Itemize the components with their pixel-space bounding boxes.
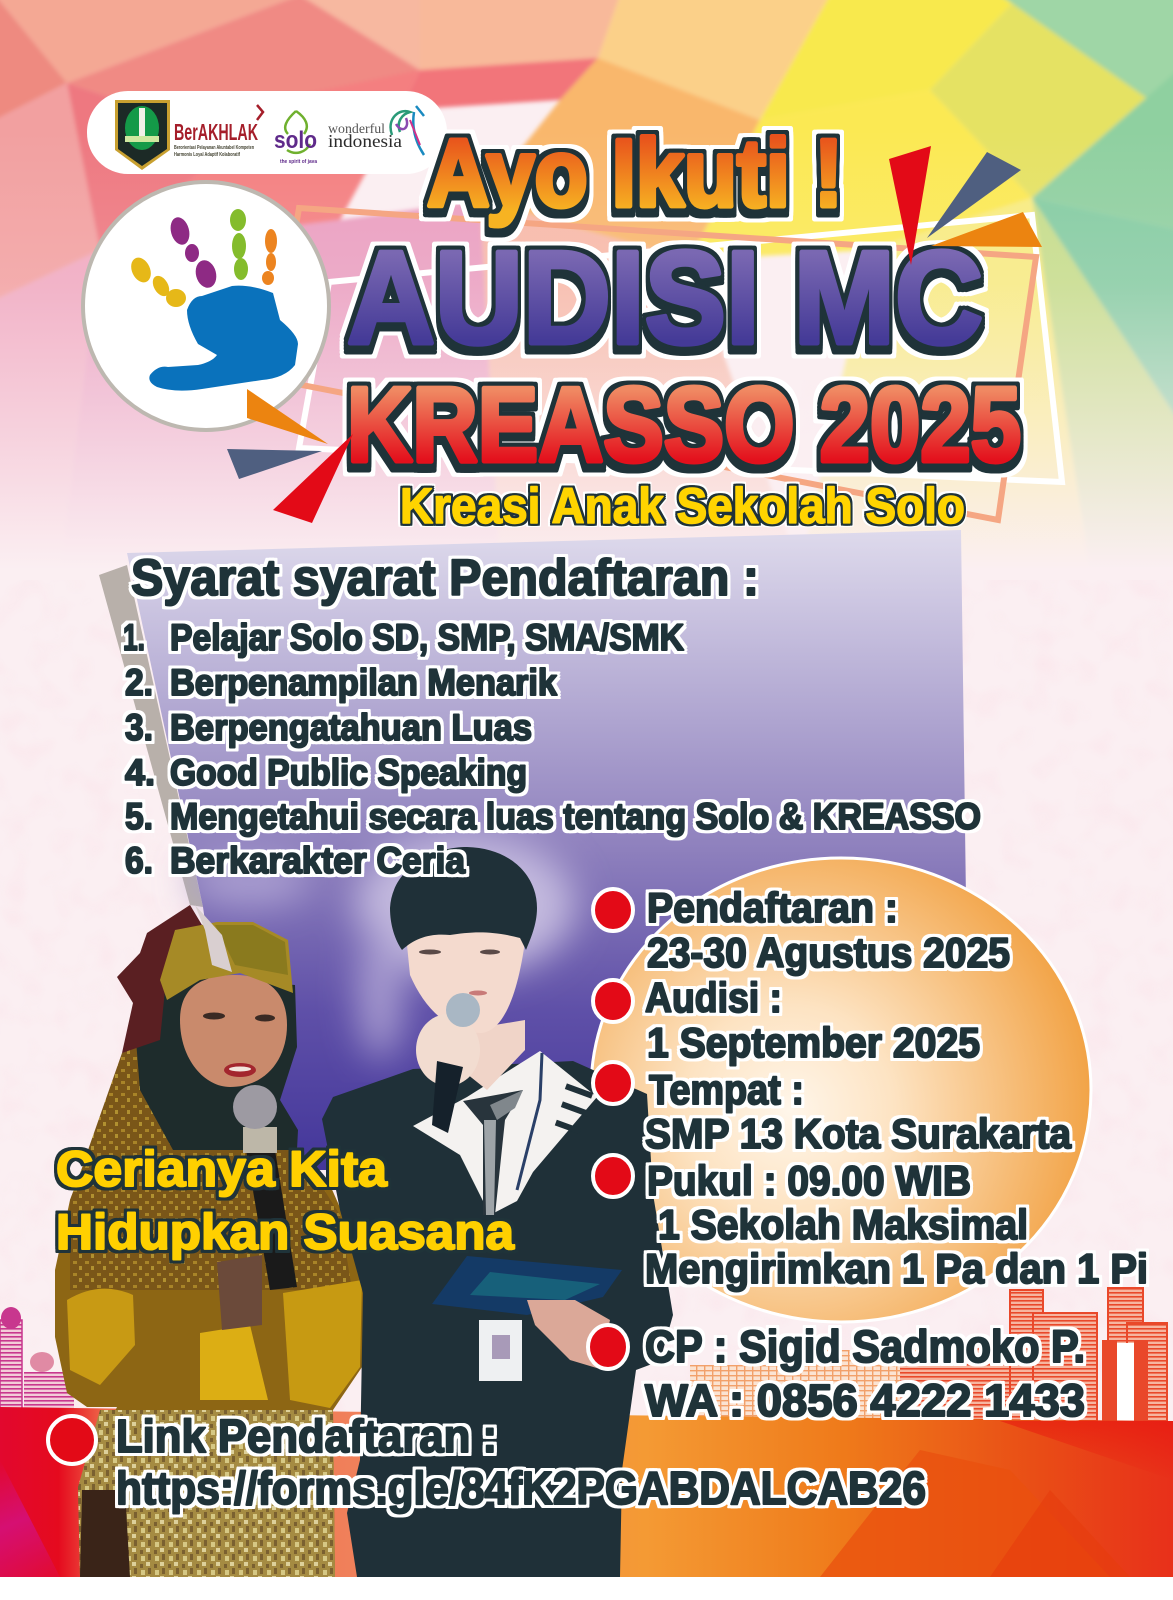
logo pill [87,91,447,174]
event info [645,884,1148,1292]
registration link: https://forms.gle/84fK2PGABDALCAB26 [116,1462,926,1514]
contact person [645,1321,1085,1426]
city skyline left [0,1307,74,1420]
bullets [48,889,633,1464]
icon: city emblem [115,100,170,170]
event info: SMP 13 Kota Surakarta [645,1110,1072,1157]
purple requirements panel [127,530,966,1170]
tie [463,1090,523,1215]
icon: yellow finger [127,254,186,307]
city skyline right [690,1288,1167,1421]
lower dark fold [80,1490,130,1577]
left sleeve highlight [67,1289,135,1385]
man halo [190,835,575,1060]
requirements heading: Syarat syarat Pendaftaran : [131,549,759,606]
requirements list: 3. [125,707,153,748]
requirements list: Berkarakter Ceria [170,840,465,881]
eyes and mouth [419,950,500,996]
woman [55,905,367,1577]
contact person: WA : 0856 4222 1433 [645,1375,1085,1426]
requirements list: Berpengatahuan Luas [170,707,532,748]
blue card [432,1256,622,1315]
orange info circle [591,858,1091,1322]
gold veil [88,1040,175,1170]
requirements list: 5. [125,796,153,837]
hand logo circle [83,182,329,430]
dress upper sparkle [70,1147,352,1290]
red triangle top [889,146,931,265]
requirements list: Good Public Speaking [170,752,527,793]
solo logo [274,111,317,165]
gold hat [160,922,293,1000]
event info: Pukul : 09.00 WIB [647,1157,971,1204]
shirt [413,1051,597,1215]
card hand [527,1300,610,1369]
lapel stripes [555,1083,593,1134]
icon: purple finger [168,215,219,290]
ID badge [479,1320,522,1381]
slogan [56,1141,515,1260]
jacket [322,1061,673,1577]
solo logo: solo [274,127,317,154]
man [322,847,673,1577]
chest highlight [200,1325,268,1400]
orange triangle bottom [247,389,328,444]
dark red head wrap [117,905,205,1053]
hair [390,847,537,950]
registration link: Link Pendaftaran : [116,1410,497,1462]
bottom colour band [0,1407,1173,1577]
contact person: CP : Sigid Sadmoko P. [645,1321,1085,1372]
icon: green finger [230,209,248,280]
BerAKHLAK logo: Berorientasi Pelayanan Akuntabel Kompeten [174,145,254,151]
requirements list: 6. [125,840,153,881]
slate triangle bottom [227,449,322,479]
requirements list: Berpenampilan Menarik [170,662,557,703]
hands [217,1255,262,1330]
wonderful indonesia logo [328,106,424,155]
icon: blue palm [149,286,298,391]
requirements list: Pelajar Solo SD, SMP, SMA/SMK [170,617,684,658]
event info: Mengirimkan 1 Pa dan 1 Pi [645,1245,1148,1292]
wonderful indonesia logo: indonesia [328,131,402,151]
face [180,975,287,1087]
black hijab [133,975,298,1150]
right sleeve [283,1280,362,1408]
event info: Pendaftaran : [647,884,898,931]
event info: Tempat : [649,1066,804,1113]
title: Ayo Ikuti: Ayo Ikuti ! [427,120,843,227]
slogan: Hidupkan Suasana [56,1204,515,1260]
hat sequins [195,905,232,972]
event info: 23-30 Agustus 2025 [647,929,1010,976]
mic hand [416,1014,480,1086]
slate triangle top [927,152,1021,238]
registration link [116,1410,926,1514]
event info: 1 September 2025 [647,1019,980,1066]
eyes and lips [203,1012,275,1077]
neck [462,1020,525,1090]
mic [233,1085,297,1290]
orange frame [271,208,1036,520]
subtitle: Kreasi Anak Sekolah Solo [400,478,965,534]
requirements list: 1. [123,617,145,658]
requirements list [123,617,981,881]
lower sparkle skirt [78,1410,335,1577]
face [405,906,527,1033]
mic head [446,993,480,1027]
BerAKHLAK logo [174,105,263,158]
gray panel strip [99,565,203,907]
slogan: Cerianya Kita [56,1141,388,1197]
icon: orange finger [262,229,277,285]
event info: Audisi : [645,974,782,1021]
orange triangle top [931,212,1042,247]
requirements list: 4. [125,752,155,793]
BerAKHLAK logo: BerAKHLAK [174,119,258,145]
lanyard [517,1053,542,1190]
title: KREASSO 2025: KREASSO 2025 [347,366,1021,484]
event info: 1 Sekolah Maksimal [658,1201,1028,1248]
BerAKHLAK logo: Harmonis Loyal Adaptif Kolaboratif [174,152,240,158]
mic handle [432,1061,463,1133]
white frame [299,215,1062,482]
requirements list: Mengetahui secara luas tentang Solo & KREASSO [170,796,981,837]
solo logo: the spirit of java [280,159,317,165]
dress [55,1147,367,1577]
wonderful indonesia logo: wonderful [328,122,385,137]
red triangle bottom [273,434,353,523]
title: AUDISI MC: AUDISI MC [347,224,983,371]
requirements list: 2. [125,662,153,703]
